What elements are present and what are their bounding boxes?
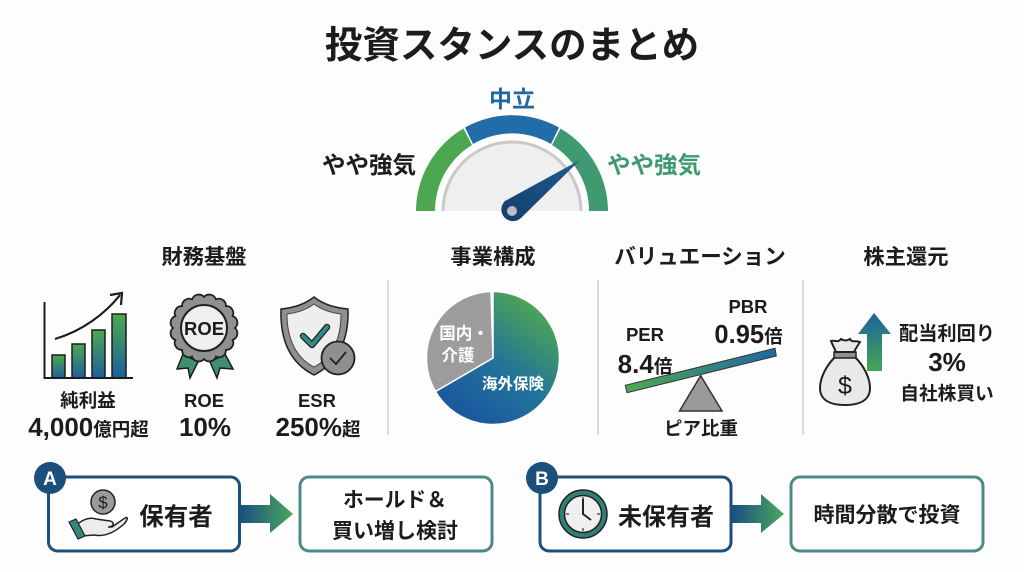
panel: non-holder	[526, 462, 731, 551]
icon: hand with coin	[69, 490, 127, 539]
pie label: domestic and care: 国内・	[439, 324, 489, 343]
pie slice: domestic and care	[426, 292, 493, 392]
panel: non-holder action: 時間分散で投資	[814, 504, 960, 527]
icon: money bag with arrow	[820, 313, 891, 405]
text: net profit: 4,000億円超	[28, 412, 149, 442]
pie chart: 介護	[442, 346, 475, 365]
icon: clock	[559, 490, 607, 538]
label: non-holder: 未保有者	[618, 504, 714, 531]
panel: holder action	[300, 477, 492, 551]
badge A	[34, 462, 66, 494]
pie slice: overseas insurance	[436, 292, 559, 424]
dividers	[388, 280, 803, 435]
label: holder: 保有者	[139, 503, 213, 531]
PBR label: PBR	[728, 296, 768, 317]
gauge dial face	[443, 142, 581, 211]
seesaw beam	[625, 348, 776, 393]
gauge label: right: やや強気	[607, 152, 701, 178]
icon: ESR shield	[281, 297, 354, 375]
gauge segment: centre blue	[465, 115, 559, 144]
icon: ROE badge: ROE	[184, 318, 224, 339]
heading: financial base: 財務基盤	[161, 245, 247, 269]
gauge segment: right green	[552, 128, 608, 211]
text: dividend and buyback	[899, 323, 995, 404]
heading: valuation: バリュエーション	[614, 245, 786, 269]
text: ESR: ESR	[298, 390, 336, 411]
gauge needle hub	[507, 206, 517, 216]
gauge label: left: やや強気	[322, 152, 416, 178]
panel: holder: A	[43, 469, 57, 490]
text: ROE: 10%	[179, 412, 231, 442]
panel: holder	[34, 462, 240, 551]
text: dividend and buyback: 3%	[928, 347, 966, 377]
gauge label: centre: 中立	[489, 86, 535, 112]
icon: net profit bar chart	[44, 293, 133, 378]
heading: shareholder return: 株主還元	[863, 245, 949, 269]
text: ESR: 250%超	[275, 412, 361, 442]
seesaw fulcrum	[680, 376, 722, 411]
panel: non-holder: B	[535, 469, 549, 490]
up arrow	[858, 313, 891, 371]
title: 投資スタンスのまとめ	[325, 24, 699, 66]
panel: holder action: ホールド＆	[343, 489, 447, 512]
text: dividend and buyback: 自社株買い	[900, 383, 994, 404]
panel: non-holder action	[791, 477, 983, 551]
icon: ROE badge	[171, 295, 237, 378]
panel: holder action: 買い増し検討	[332, 520, 458, 543]
arrow: non-holder to action	[732, 494, 784, 533]
gauge needle	[501, 160, 580, 221]
pie label: overseas insurance: 海外保険	[482, 374, 544, 393]
icon: money bag with arrow: $	[838, 372, 852, 400]
text: ESR	[275, 390, 361, 442]
heading: business mix: 事業構成	[450, 245, 536, 269]
seesaw chart: 8.4倍	[618, 349, 672, 379]
seesaw chart	[618, 296, 783, 439]
gauge segment: left green	[416, 128, 472, 211]
gauge	[322, 86, 701, 221]
pie chart	[426, 292, 559, 424]
arrow: holder to action	[240, 494, 293, 533]
money bag	[820, 357, 870, 405]
text: dividend and buyback: 配当利回り	[899, 323, 995, 345]
PER label: PER	[626, 324, 664, 345]
text: ROE: ROE	[184, 390, 224, 411]
badge B	[526, 462, 558, 494]
text: net profit: 純利益	[60, 390, 116, 411]
icon: hand with coin: $	[98, 493, 108, 512]
peer comparison label: ピア比重	[664, 418, 738, 439]
gauge inner ring	[443, 142, 581, 211]
seesaw chart: 0.95倍	[714, 321, 783, 349]
text: ROE	[179, 390, 231, 442]
text: net profit	[28, 390, 149, 442]
